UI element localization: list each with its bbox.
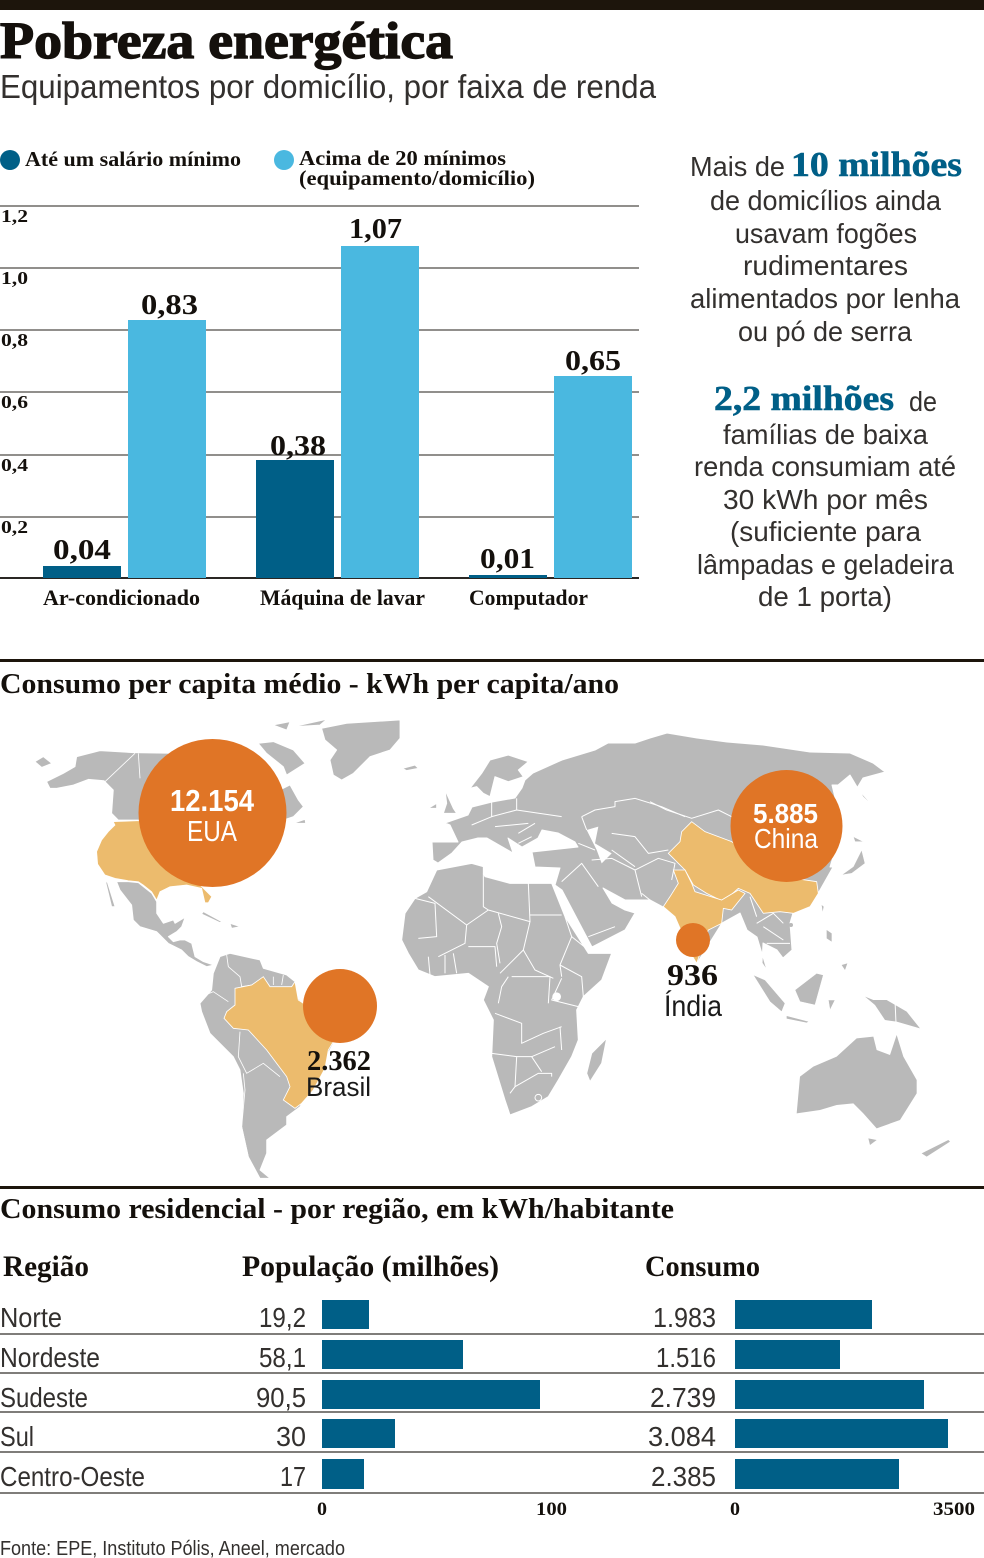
bars: Computador: 0,65 [565, 346, 621, 377]
bars: Ar-condicionado [43, 290, 206, 610]
y axis labels: 0,8 [1, 330, 28, 350]
bars: Ar-condicionado: 0,83 [141, 290, 198, 321]
bars: Ar-condicionado: 0,04 [53, 535, 111, 566]
axis labels: 100 [536, 1499, 567, 1520]
row: Sudeste: 2.739 [650, 1382, 716, 1413]
axis labels [317, 1499, 975, 1520]
callout: 10 million households: usavam fogões [735, 218, 917, 249]
callout: 2.2 million families: renda consumiam até [694, 451, 956, 482]
table headers: Região [3, 1250, 89, 1283]
row: Nordeste: Nordeste [0, 1342, 100, 1373]
y axis labels [1, 206, 28, 537]
title: Pobreza energética [0, 13, 453, 70]
callout: 2.2 million families: famílias de baixa [723, 419, 928, 450]
callout: 2.2 million families: (suficiente para [730, 516, 921, 547]
legend [0, 146, 535, 190]
callout: 10 million households: alimentados por lenha [690, 283, 960, 314]
bars: Computador [469, 346, 632, 610]
y axis labels: 0,6 [1, 392, 28, 412]
row: Nordeste: 58,1 [259, 1342, 306, 1373]
row: Sul: 3.084 [648, 1421, 716, 1452]
row: Sudeste [0, 1380, 924, 1413]
subtitle: Equipamentos por domicílio, por faixa de renda [0, 68, 657, 105]
y axis labels: 1,2 [1, 206, 28, 226]
row: Sudeste: Sudeste [0, 1382, 88, 1413]
legend item: above 20 minimum wages: Acima de 20 mínimos [299, 146, 506, 170]
bubble: Índia: 936 [667, 957, 718, 992]
row: Sul: 30 [276, 1421, 306, 1452]
bubble: China: China [754, 823, 818, 854]
callout: 10 million households: 10 milhões [791, 145, 962, 184]
India highlight [663, 870, 745, 963]
table headers: Consumo [645, 1250, 760, 1283]
legend item: above 20 minimum wages [274, 146, 535, 190]
bubble: China [730, 770, 842, 882]
row: Centro-Oeste: 2.385 [651, 1461, 716, 1492]
bubble: EUA: EUA [187, 816, 238, 848]
USA highlight [97, 821, 233, 903]
callout: 10 million households: ou pó de serra [738, 316, 912, 347]
bubble: Brasil: 2.362 [307, 1046, 371, 1077]
row: Sul: Sul [0, 1421, 34, 1452]
China highlight [668, 822, 818, 913]
bars: Máquina de lavar: Máquina de lavar [260, 585, 425, 610]
bubble: Brasil [303, 969, 377, 1102]
y axis labels: 0,2 [1, 517, 28, 537]
row: Nordeste [0, 1340, 840, 1373]
bars: Computador: Computador [469, 585, 588, 610]
callout: 10 million households: Mais de [690, 151, 785, 182]
bubble: Brasil: Brasil [306, 1072, 371, 1102]
axis labels: 0 [730, 1499, 740, 1520]
Eurasia [402, 733, 950, 1157]
table headers: População (milhões) [242, 1250, 499, 1283]
bars: Máquina de lavar: 1,07 [349, 214, 402, 245]
row: Centro-Oeste [0, 1459, 899, 1492]
callout: 2.2 million families: de 1 porta) [758, 581, 892, 612]
table: region population and consumption [0, 1250, 984, 1520]
callout: 2.2 million families: 30 kWh por mês [723, 484, 928, 515]
row: Norte: 19,2 [259, 1302, 306, 1333]
bars: Computador: 0,01 [480, 544, 535, 575]
bubble: Índia [664, 923, 722, 1023]
bars: Ar-condicionado: Ar-condicionado [43, 585, 200, 610]
heading: per capita consumption: Consumo per capita médio - kWh per capita/ano [0, 668, 619, 700]
legend item: up to one minimum wage: Até um salário mínimo [25, 147, 241, 171]
bars: Máquina de lavar: 0,38 [270, 431, 326, 462]
bubble: China: 5.885 [753, 798, 818, 829]
row: Sudeste: 90,5 [256, 1382, 306, 1413]
y axis labels: 0,4 [1, 455, 28, 475]
bubble: EUA [138, 739, 286, 887]
world map [35, 719, 950, 1178]
Africa [402, 863, 612, 1115]
axis labels: 3500 [933, 1499, 975, 1520]
Brazil highlight [224, 977, 333, 1108]
callout: 2.2 million families: 2,2 milhões [714, 379, 894, 418]
bar chart: equipment per household [0, 206, 639, 610]
legend item: above 20 minimum wages: (equipamento/domicílio) [299, 166, 535, 190]
row: Centro-Oeste: 17 [280, 1461, 306, 1492]
callout: 2.2 million families: lâmpadas e geladeira [697, 549, 954, 580]
row: Sul [0, 1419, 948, 1452]
bubble: EUA: 12.154 [170, 783, 255, 818]
row: Nordeste: 1.516 [656, 1342, 716, 1373]
row: Norte: 1.983 [653, 1302, 716, 1333]
row: Norte [0, 1300, 872, 1333]
bubble: Índia: Índia [664, 990, 722, 1023]
callout: 10 million households [690, 145, 962, 347]
row: Norte: Norte [0, 1302, 62, 1333]
callout: 10 million households: de domicílios ainda [710, 185, 941, 216]
row: Centro-Oeste: Centro-Oeste [0, 1461, 145, 1492]
table headers [3, 1250, 760, 1283]
americas land [35, 719, 400, 1178]
callout: 2.2 million families: de [909, 386, 937, 417]
callout: 2.2 million families [694, 379, 956, 612]
y axis labels: 1,0 [1, 268, 28, 288]
callout: 10 million households: rudimentares [743, 250, 908, 281]
axis labels: 0 [317, 1499, 327, 1520]
bars: Máquina de lavar [256, 214, 425, 610]
heading: residential consumption: Consumo residencial - por região, em kWh/habitante [0, 1193, 674, 1225]
